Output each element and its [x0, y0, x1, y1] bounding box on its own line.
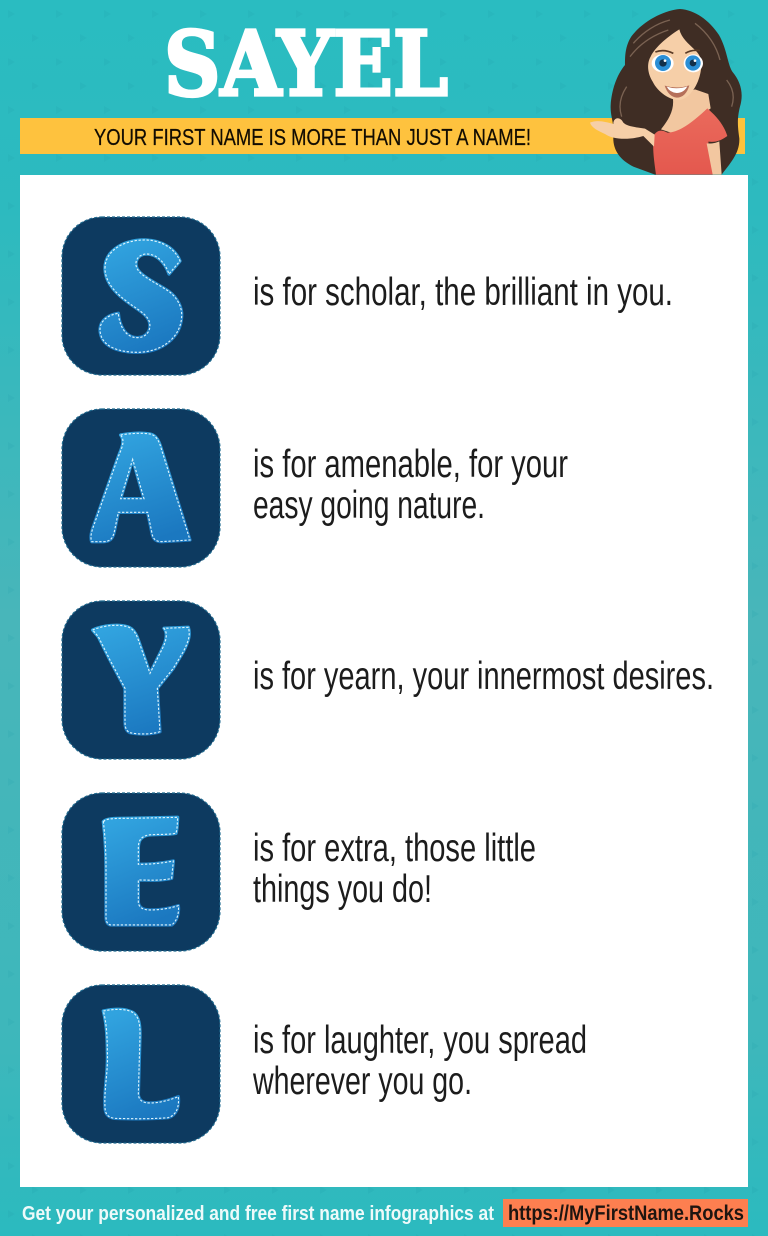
hair	[611, 9, 742, 175]
row 3: Y	[62, 601, 714, 759]
left hand and forearm	[590, 118, 655, 147]
text: A lines	[253, 443, 568, 527]
footer	[22, 1199, 748, 1227]
text: A lines: easy going nature.	[253, 484, 485, 527]
text: A lines: is for amenable, for your	[253, 443, 568, 486]
right arm	[707, 141, 722, 175]
text: L lines: is for laughter, you spread	[253, 1019, 587, 1062]
icon: stitched letter E	[62, 793, 220, 951]
white content panel	[20, 175, 748, 1187]
face	[648, 29, 701, 100]
footer call to action: Get your personalized and free first name infographics at	[22, 1203, 494, 1225]
row 5: L	[62, 985, 587, 1143]
icon: stitched letter S	[62, 217, 220, 375]
title: SAYEL	[164, 11, 448, 116]
text: E lines: things you do!	[253, 868, 432, 911]
icon: stitched letter L	[62, 985, 220, 1143]
neck and chest	[661, 89, 711, 134]
icon: stitched letter Y	[62, 601, 220, 759]
eyes	[652, 50, 703, 72]
cartoon woman mascot	[590, 9, 742, 175]
text: E lines: is for extra, those little	[253, 827, 536, 870]
row 1: S	[62, 217, 673, 375]
row 2: A	[62, 409, 568, 567]
text: L lines: wherever you go.	[252, 1060, 472, 1103]
text: L lines	[252, 1019, 587, 1103]
text: E lines	[253, 827, 536, 911]
row 4: E	[62, 793, 536, 951]
subtitle banner: YOUR FIRST NAME IS MORE THAN JUST A NAME!	[94, 124, 531, 150]
shirt	[653, 108, 727, 175]
subtitle banner	[20, 118, 745, 154]
icon: stitched letter A	[62, 409, 220, 567]
smile	[665, 85, 689, 98]
